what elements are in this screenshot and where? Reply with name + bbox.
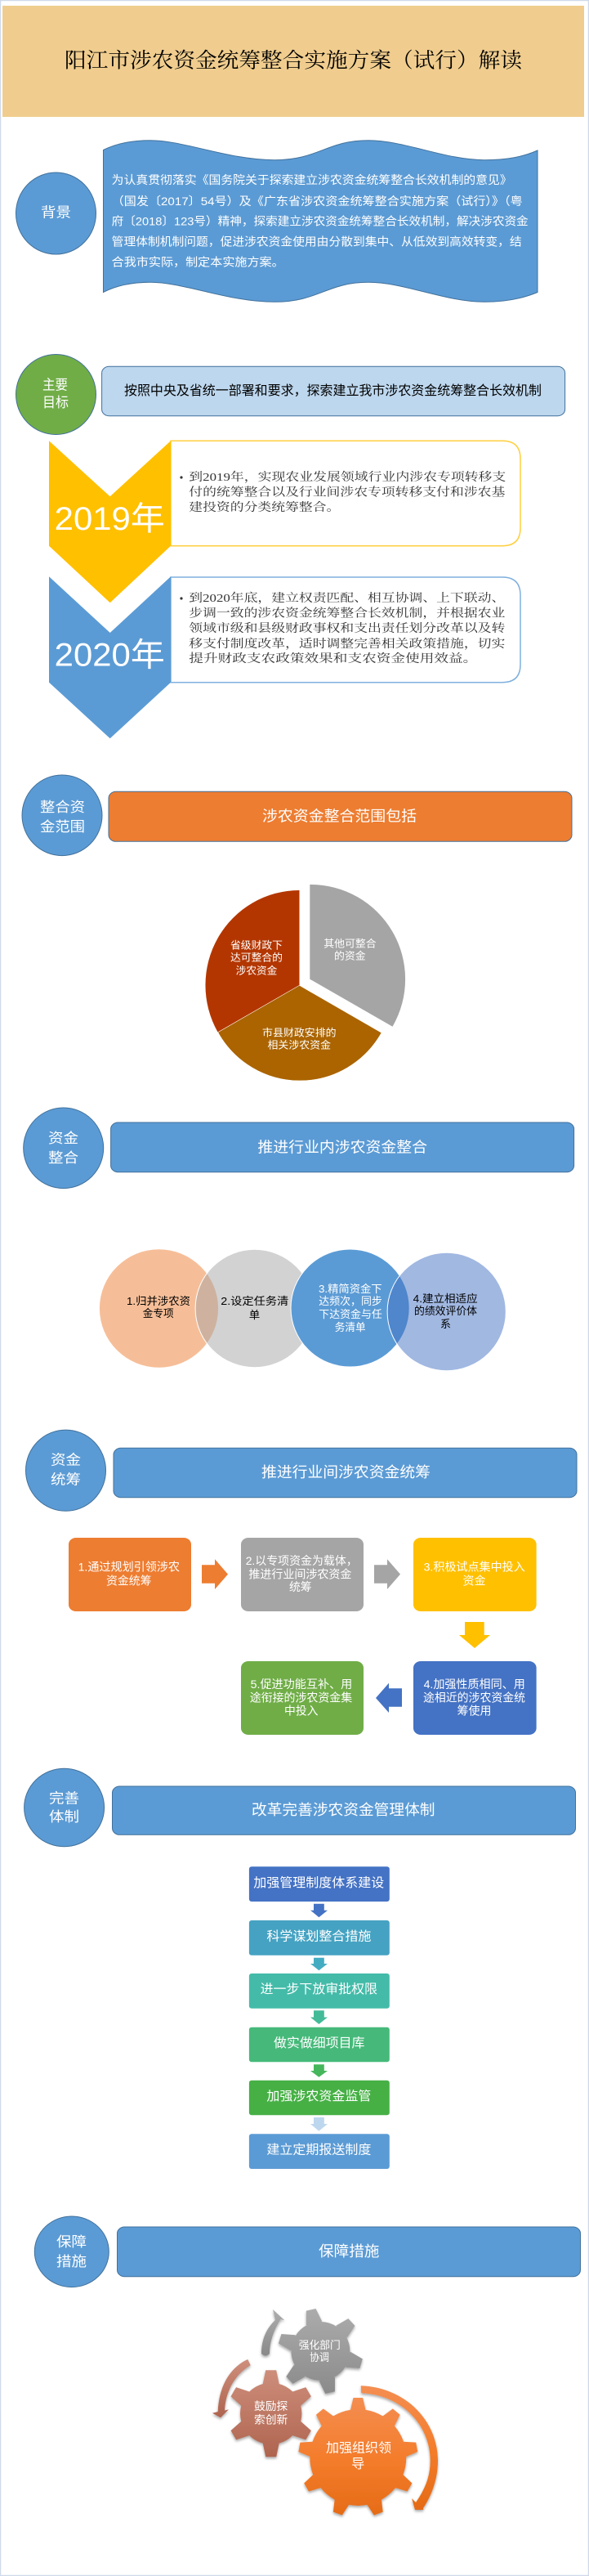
- banner: within-sector consolidation: [111, 1122, 574, 1172]
- circle 4: [387, 1252, 506, 1371]
- title banner: 阳江市涉农资金统筹整合实施方案（试行）解读: [65, 49, 523, 72]
- badge: 保障措施: [34, 2216, 109, 2287]
- circle 2: 2.设定任务清: [221, 1295, 288, 1307]
- goal banner: [102, 366, 565, 416]
- step 5: 途衔接的涉农资金集: [250, 1691, 352, 1705]
- circle 2: [195, 1249, 314, 1368]
- process step 2: [249, 1920, 390, 1956]
- text box: 2020 goal: 移支付制度改革，适时调整完善相关政策措施，切实: [189, 637, 505, 651]
- badge: 保障措施: 保障: [56, 2234, 87, 2250]
- wave panel: background text: 为认真贯彻落实《国务院关于探索建立涉农资金统筹整合长效机制的意见》: [112, 173, 512, 186]
- arrow: process 5 to 6: [310, 2117, 328, 2131]
- badge: 完善体制: 体制: [49, 1809, 79, 1825]
- arrow: process 3 to 4: [310, 2010, 328, 2024]
- badge: 整合资金范围: 金范围: [40, 819, 85, 835]
- text box: 2020 goal: [171, 577, 520, 683]
- venn circles: [100, 1249, 506, 1371]
- chevron: 2020: [49, 576, 171, 738]
- process step 4: [249, 2027, 390, 2062]
- pie slice: city and county funds: [218, 985, 382, 1081]
- gear: strengthen leadership: 导: [351, 2457, 364, 2471]
- pie slice: city and county funds: 相关涉农资金: [268, 1038, 332, 1051]
- process step 1: 加强管理制度体系建设: [253, 1875, 384, 1890]
- step 5: 中投入: [284, 1704, 319, 1717]
- banner: scope: [109, 791, 572, 841]
- process step 5: [249, 2081, 390, 2115]
- circle 3: 达频次，同步: [319, 1295, 382, 1307]
- gear diagram: [212, 2305, 438, 2520]
- pie slice: other funds: [310, 885, 405, 1027]
- arrow: step 2 to 3: [374, 1559, 400, 1589]
- text box: 2020 goal: 步调一致的涉农资金统筹整合长效机制，并根据农业: [189, 607, 505, 620]
- step 5: [241, 1661, 364, 1735]
- pie chart: [205, 885, 405, 1081]
- circle 3: 下达资金与任: [319, 1308, 382, 1320]
- timeline: 2019: [49, 441, 520, 603]
- text box: 2020 goal: 领域市级和县级财政事权和支出责任划分改革以及转: [189, 621, 505, 635]
- step 4: 筹使用: [457, 1704, 492, 1717]
- banner: within-sector consolidation: 推进行业内涉农资金整合: [257, 1139, 427, 1155]
- process step 2: 科学谋划整合措施: [266, 1929, 371, 1944]
- arrow: step 1 to 2: [202, 1559, 228, 1589]
- step 5: 5.促进功能互补、用: [251, 1678, 352, 1691]
- gear: encourage innovation: 索创新: [254, 2413, 288, 2426]
- process step 6: [249, 2134, 390, 2169]
- badge: 整合资金范围: [22, 775, 102, 856]
- step 2: 统筹: [289, 1580, 312, 1593]
- badge: 背景: 背景: [41, 204, 71, 221]
- step 3: 资金: [462, 1574, 485, 1587]
- process step 5: 加强涉农资金监管: [266, 2089, 371, 2103]
- banner: safeguards: [118, 2227, 580, 2277]
- step 2: 2.以专项资金为载体，: [246, 1554, 358, 1567]
- circle 3: 务清单: [335, 1321, 366, 1333]
- circle 4: 4.建立相适应: [413, 1292, 478, 1305]
- banner: management reform: [113, 1786, 575, 1835]
- goal banner: 按照中央及省统一部署和要求，探索建立我市涉农资金统筹整合长效机制: [124, 383, 542, 398]
- badge: 主要目标: [16, 355, 96, 435]
- banner: cross-sector coordination: [114, 1448, 577, 1498]
- step 4: [413, 1661, 537, 1735]
- step 3: [413, 1538, 537, 1611]
- circle 4: 的绩效评价体: [414, 1305, 477, 1317]
- badge: 资金统筹: 资金: [51, 1452, 81, 1468]
- section: improve system: [25, 1768, 576, 2169]
- wave panel: background text: 管理体制机制问题，促进涉农资金使用由分散到集中、从低效到高效转变，结: [112, 235, 522, 248]
- title banner: [2, 6, 584, 117]
- pie slice: provincial funds: 省级财政下: [230, 940, 283, 952]
- arrow: pink curved: [212, 2359, 251, 2417]
- wave panel: background text: （国发〔2017〕54号）及《广东省涉农资金统筹整合实施方案（试行）》（粤: [112, 195, 523, 208]
- pie slice: other funds: 的资金: [334, 949, 366, 961]
- badge: 主要目标: 主要: [42, 378, 68, 392]
- pie slice: city and county funds: 市县财政安排的: [262, 1026, 337, 1038]
- vertical process flow: [249, 1866, 390, 2169]
- badge: 完善体制: [25, 1768, 105, 1847]
- pie slice: provincial funds: [205, 890, 299, 1033]
- banner: scope: 涉农资金整合范围包括: [262, 808, 417, 824]
- circle 1: 1.归并涉农资: [127, 1295, 190, 1307]
- badge: 完善体制: 完善: [49, 1790, 79, 1807]
- wave panel: background text: [103, 141, 538, 302]
- section: integration scope: [22, 775, 572, 1081]
- text box: 2019 goal: 付的统筹整合以及行业间涉农专项转移支付和涉农基: [189, 486, 505, 499]
- section: funds consolidation: [24, 1108, 574, 1371]
- arrow: orange curved: [361, 2386, 438, 2510]
- step 2: [241, 1538, 364, 1611]
- gear: strengthen leadership: [296, 2395, 421, 2520]
- gear: department coordination: [278, 2309, 364, 2397]
- circle 2: 单: [249, 1309, 260, 1321]
- step 2: 推进行业间涉农资金: [248, 1568, 351, 1581]
- pie slice: provincial funds: 达可整合的: [230, 952, 283, 964]
- circle 4: 系: [440, 1318, 451, 1330]
- badge: 资金统筹: [26, 1430, 106, 1511]
- arrow: step 3 to 4: [459, 1622, 490, 1648]
- gear: strengthen leadership: 加强组织领: [326, 2441, 391, 2456]
- badge: 背景: [16, 172, 96, 254]
- process step 6: 建立定期报送制度: [266, 2142, 371, 2157]
- circle 1: 金专项: [143, 1307, 174, 1319]
- process step 3: 进一步下放审批权限: [261, 1982, 377, 1996]
- pie slice: other funds: 其他可整合: [324, 937, 377, 949]
- gear: department coordination: 协调: [310, 2351, 329, 2363]
- text box: 2019 goal: 建投资的分类统筹整合。: [189, 500, 340, 514]
- pie slice: provincial funds: 涉农资金: [236, 964, 278, 976]
- wave panel: background text: 府〔2018〕123号）精神，探索建立涉农资金统筹整合长效机制，解决涉农资金: [112, 215, 529, 228]
- process step 3: [249, 1973, 390, 2009]
- arrow: process 4 to 5: [310, 2064, 328, 2077]
- gear: encourage innovation: 鼓励探: [254, 2400, 288, 2412]
- badge: 主要目标: 目标: [42, 395, 69, 410]
- chevron: 2019: 2019年: [55, 501, 165, 537]
- text box: 2020 goal: 提升财政支农政策效果和支农资金使用效益。: [189, 652, 477, 665]
- badge: 资金统筹: 统筹: [51, 1472, 81, 1488]
- text box: 2020 goal: 到2020年底，建立权责匹配、相互协调、上下联动、: [189, 591, 505, 605]
- circle 1: [100, 1249, 218, 1368]
- process step 1: [249, 1866, 390, 1902]
- badge: 整合资金范围: 整合资: [40, 800, 85, 815]
- banner: cross-sector coordination: 推进行业间涉农资金统筹: [261, 1464, 431, 1481]
- step 1: 资金统筹: [106, 1574, 152, 1587]
- badge: 资金整合: 资金: [48, 1131, 78, 1146]
- section: funds coordination: [26, 1430, 577, 1735]
- section: main goals: [16, 355, 565, 738]
- process step 4: 做实做细项目库: [274, 2036, 364, 2050]
- wave panel: background text: 合我市实际，制定本实施方案。: [112, 256, 284, 269]
- step 4: 4.加强性质相同、用: [424, 1678, 525, 1691]
- text box: 2019 goal: [171, 441, 520, 546]
- step 4: 途相近的涉农资金统: [423, 1691, 525, 1705]
- text box: 2019 goal: 到2019年，实现农业发展领域行业内涉农专项转移支: [189, 470, 506, 484]
- step 1: [69, 1538, 191, 1611]
- chevron: 2020: 2020年: [55, 638, 165, 674]
- gear: encourage innovation: [230, 2370, 312, 2461]
- banner: management reform: 改革完善涉农资金管理体制: [252, 1802, 435, 1818]
- badge: 资金整合: 整合: [48, 1150, 78, 1166]
- step 3: 3.积极试点集中投入: [424, 1561, 525, 1574]
- arrow: grey curved: [261, 2309, 284, 2356]
- timeline: 2020: [49, 576, 520, 738]
- section: safeguards: [34, 2216, 581, 2520]
- circle 3: [291, 1249, 409, 1367]
- badge: 资金整合: [24, 1108, 104, 1189]
- arrow: process 2 to 3: [310, 1958, 328, 1970]
- circle 3: 3.精简资金下: [319, 1283, 382, 1295]
- arrow: process 1 to 2: [310, 1904, 328, 1917]
- banner: safeguards: 保障措施: [319, 2243, 379, 2260]
- badge: 保障措施: 措施: [56, 2254, 87, 2269]
- chevron: 2019: [49, 441, 171, 603]
- gear: department coordination: 强化部门: [299, 2339, 341, 2351]
- section: background: [16, 141, 538, 302]
- step 1: 1.通过规划引领涉农: [78, 1561, 180, 1574]
- arrow: step 4 to 5: [376, 1683, 402, 1713]
